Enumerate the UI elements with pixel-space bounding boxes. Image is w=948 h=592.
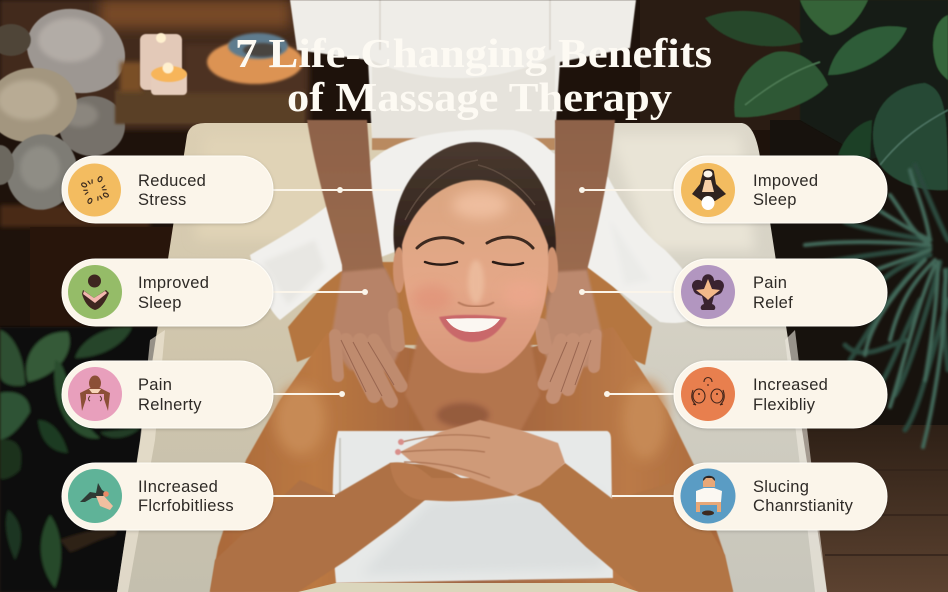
text: Increased Flexibliy: Increased [753, 376, 828, 394]
title: 7 Life-Changing Benefits [235, 30, 712, 76]
text: Iincreased Flcrfobitliess: IIncreased [138, 478, 218, 496]
therapist shirt [290, 0, 636, 150]
woman's face and hair [393, 142, 558, 373]
closed eyes [425, 262, 523, 265]
panel: Iincreased Flcrfobitliess [62, 463, 273, 530]
title [235, 30, 712, 120]
icon: figure with crossed arms [68, 265, 122, 319]
upper back skin [288, 262, 652, 365]
folded hands [390, 420, 565, 501]
foliage top right [705, 0, 948, 190]
icon: back and shoulders [68, 367, 122, 421]
river stones [0, 0, 137, 218]
therapist right arm and hand [540, 120, 615, 397]
panel: Pain Relnerty [62, 361, 273, 428]
icon: stress burst [68, 164, 121, 216]
text: Improved Sleep: Improved [138, 274, 209, 292]
text: Impoved Sleep: Sleep [753, 191, 797, 209]
candle tray [115, 33, 305, 124]
icon: person in white shirt [680, 468, 736, 524]
woman's forearms [210, 463, 733, 592]
connector lines left [270, 187, 401, 496]
text: Reduced Stress: Stress [138, 191, 187, 209]
therapist left arm and hand [307, 120, 402, 401]
panel: Slucing Chanrstianity [674, 463, 887, 530]
massage table [117, 123, 827, 592]
foliage bottom left [0, 327, 175, 592]
text: Impoved Sleep: Impoved [753, 172, 818, 190]
text: Slucing Chanrstianity: Chanrstianity [753, 497, 854, 515]
woman's neck [405, 335, 540, 432]
palm fronds right [805, 165, 948, 447]
woman's torso and shoulders [210, 327, 733, 592]
icon: pain relief figure [681, 265, 735, 319]
text: Pain Relief: Relef [753, 294, 793, 312]
eyebrows [417, 237, 533, 248]
icon: seated meditating figure [681, 163, 735, 217]
folded towel [332, 431, 613, 583]
text: Improved Sleep: Sleep [138, 294, 182, 312]
panel: Impoved Sleep (right) [674, 156, 887, 223]
icon: stretching figure [68, 469, 122, 523]
text: Slucing Chanrstianity: Slucing [753, 478, 809, 496]
text: Pain Relief: Pain [753, 274, 787, 292]
text: Reduced Stress: Reduced [138, 172, 206, 190]
title: of Massage Therapy [287, 74, 673, 120]
text: Pain Relnerty: Relnerty [138, 396, 202, 414]
panel: Pain Relief [674, 259, 887, 326]
text: Iincreased Flcrfobitliess: Flcrfobitliess [138, 497, 234, 515]
panel: Improved Sleep (left) [62, 259, 273, 326]
icon: flexibility joints [681, 367, 735, 421]
panel: Reduced Stress [62, 156, 273, 223]
text: Pain Relnerty: Pain [138, 376, 172, 394]
connector lines right [579, 187, 680, 496]
table strip below towel [298, 583, 639, 592]
text: Increased Flexibliy: Flexibliy [753, 396, 816, 414]
panel: Increased Flexibliy [674, 361, 887, 428]
white sheet [250, 130, 706, 323]
smile [439, 315, 507, 342]
